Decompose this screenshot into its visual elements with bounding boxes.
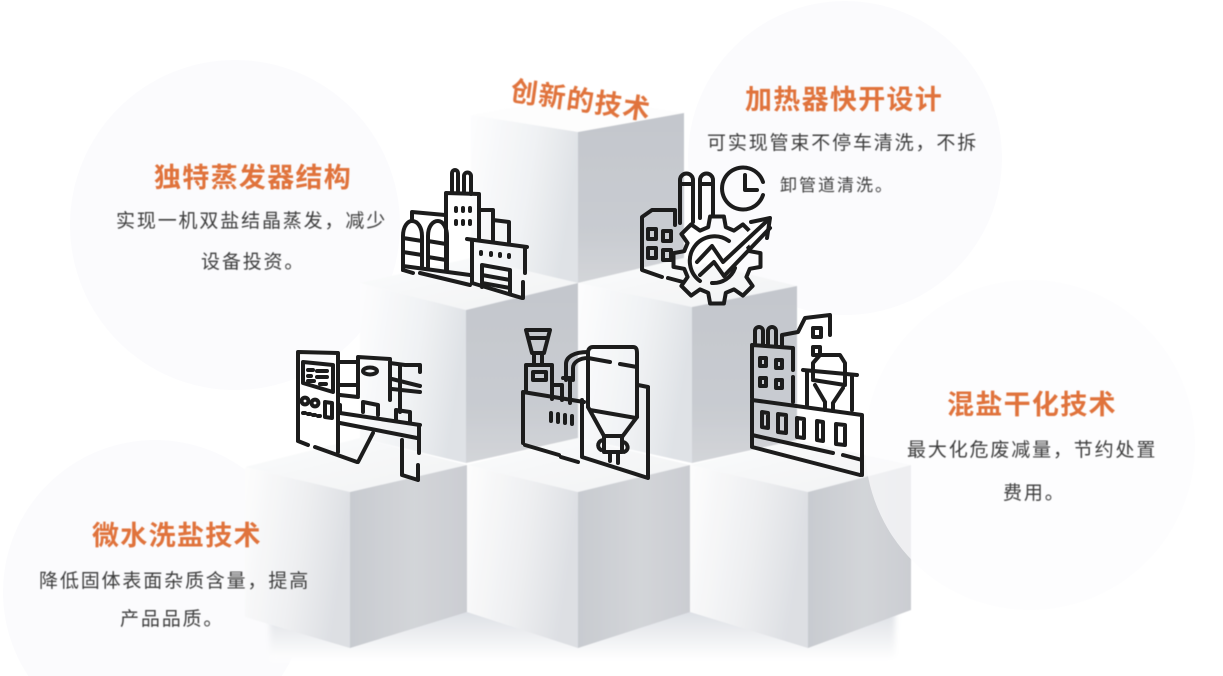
description line 1: 降低固体表面杂质含量，提高: [39, 571, 310, 592]
description line 1: 实现一机双盐结晶蒸发，减少: [116, 211, 387, 232]
description line 1: 可实现管束不停车清洗，不拆: [707, 133, 978, 154]
heading: 加热器快开设计: [745, 85, 943, 115]
circle: bottom left: [3, 440, 307, 676]
description line 2: 卸管道清洗。: [780, 176, 894, 195]
cube: top: [471, 96, 684, 283]
panel: 加热器快开设计: [707, 84, 978, 195]
icon: silo and hopper: [523, 330, 648, 478]
heading: 微水洗盐技术: [92, 521, 262, 551]
icon: injection machine: [298, 352, 420, 480]
floor shadow: [270, 605, 895, 660]
cube: middle right: [578, 258, 797, 463]
circle: top right: [688, 1, 1002, 315]
cube: middle left: [360, 258, 578, 463]
panel: 混盐干化技术: [907, 390, 1157, 504]
cube: bottom centre: [467, 438, 690, 648]
heading: 独特蒸发器结构: [154, 163, 352, 193]
circle: right, translucent over cube: [865, 280, 1195, 610]
heading: 混盐干化技术: [947, 390, 1117, 420]
heading, tilted: 创新的技术: [509, 76, 653, 126]
icon: gear, clock and growth arrow: [642, 168, 770, 304]
icon: plant with vessel: [752, 315, 862, 475]
description line 2: 产品品质。: [120, 609, 224, 630]
icon: factory with silos: [403, 170, 527, 298]
circle: left: [70, 60, 400, 390]
cube: bottom left: [245, 438, 467, 648]
description line 2: 设备投资。: [201, 252, 305, 273]
cube: bottom right: [690, 440, 911, 648]
cube pyramid: [245, 96, 911, 648]
panel: 微水洗盐技术: [39, 520, 310, 630]
description line 2: 费用。: [1003, 483, 1066, 504]
panel: 独特蒸发器结构: [116, 162, 387, 273]
description line 1: 最大化危废减量，节约处置: [907, 440, 1157, 461]
